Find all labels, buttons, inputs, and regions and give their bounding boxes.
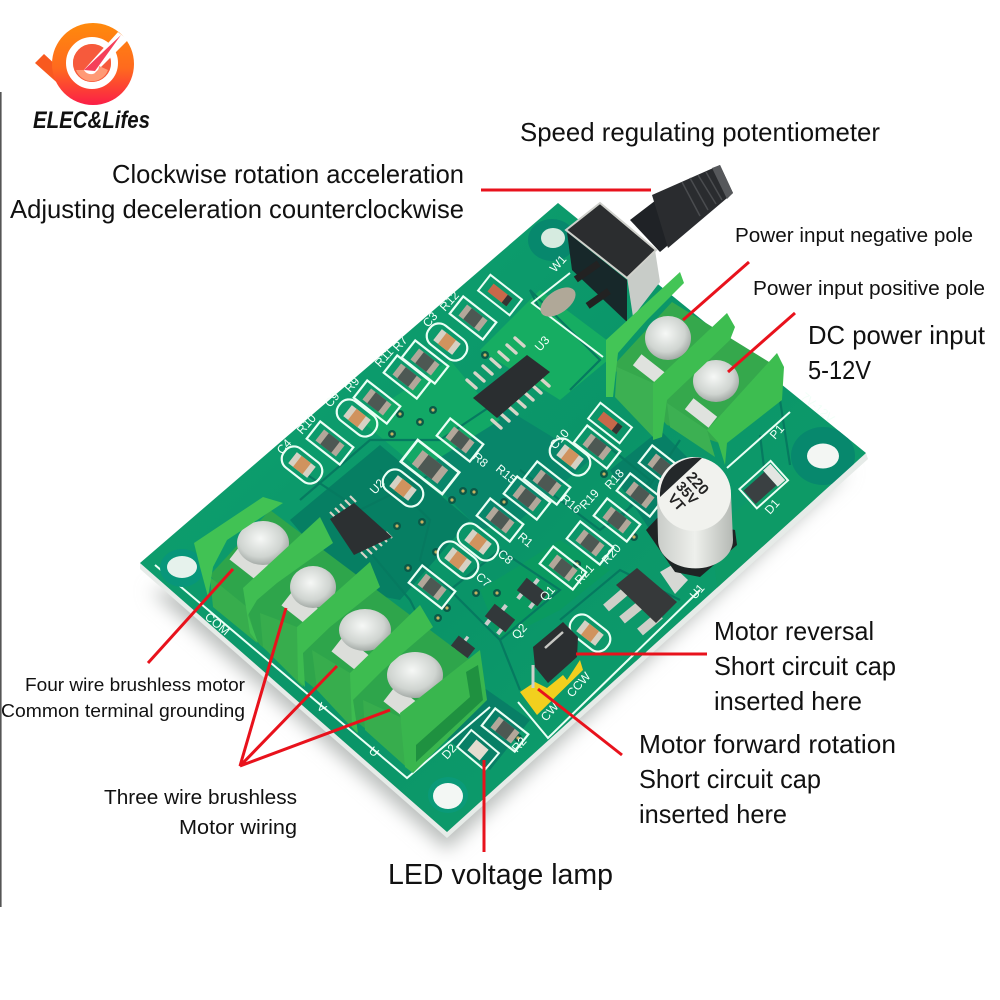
IC U3 bbox=[467, 338, 550, 428]
arrow: motor forward bbox=[538, 689, 622, 755]
silkscreen labels: R12 bbox=[437, 288, 462, 314]
label: motor reversal: Short circuit cap bbox=[714, 651, 896, 681]
silkscreen labels: R2 bbox=[509, 734, 530, 755]
jumper with short circuit cap bbox=[520, 622, 583, 715]
power input terminal block bbox=[606, 272, 784, 465]
potentiometer bbox=[535, 165, 733, 322]
silkscreen labels: C3 bbox=[420, 309, 441, 330]
silkscreen labels: R16 bbox=[558, 492, 584, 517]
arrow: positive pole bbox=[728, 313, 795, 372]
electrolytic capacitor: 35V bbox=[673, 478, 702, 508]
label: motor reversal: inserted here bbox=[714, 686, 862, 716]
terminal front faces bbox=[210, 577, 413, 773]
silkscreen labels: R10 bbox=[294, 411, 319, 437]
label: four wire motor: Common terminal grounding bbox=[1, 700, 245, 721]
silkscreen labels: COM bbox=[202, 610, 233, 638]
label: motor reversal bbox=[714, 616, 896, 716]
silkscreen labels: R21 bbox=[572, 561, 597, 587]
copper pours and traces bbox=[155, 273, 840, 778]
silkscreen labels: CCW bbox=[564, 669, 594, 700]
soft shadow bbox=[150, 470, 850, 850]
IC U2 bbox=[330, 496, 392, 558]
silkscreen labels: D2 bbox=[439, 741, 460, 762]
screw: positive pole bbox=[685, 360, 739, 428]
silkscreen labels: C8 bbox=[495, 547, 516, 567]
silkscreen labels: C4 bbox=[274, 436, 295, 457]
silkscreen labels: C10 bbox=[547, 426, 572, 452]
label: four wire motor: Four wire brushless motor bbox=[25, 674, 245, 695]
vias bbox=[388, 351, 638, 742]
housing bbox=[535, 203, 660, 322]
electrolytic capacitor: VT bbox=[665, 490, 689, 514]
label: motor forward rotation bbox=[639, 729, 896, 829]
silkscreen labels: U3 bbox=[532, 333, 553, 354]
icon: logo target mark bbox=[35, 23, 134, 105]
voltage regulator U1 bbox=[606, 565, 688, 632]
arrow: potentiometer direction bbox=[481, 188, 651, 192]
board edge thickness bbox=[140, 453, 868, 838]
silkscreen labels: R19 bbox=[577, 486, 602, 512]
left edge rule bbox=[0, 92, 2, 907]
label: LED voltage lamp: LED voltage lamp bbox=[388, 859, 613, 891]
silkscreen labels: Q2 bbox=[509, 621, 530, 642]
silkscreen labels: Q1 bbox=[537, 583, 558, 604]
electrolytic capacitor: 220 bbox=[683, 469, 712, 499]
label: three wire motor: Motor wiring bbox=[179, 816, 297, 839]
silkscreen labels: D1 bbox=[762, 496, 783, 517]
label: three wire motor bbox=[104, 786, 297, 839]
silkscreen labels: R7 bbox=[390, 333, 411, 354]
label: rotation direction bbox=[10, 159, 464, 224]
brand name: ELEC&Lifes bbox=[33, 107, 150, 134]
silkscreen labels: U bbox=[366, 744, 382, 760]
silkscreen labels: R20 bbox=[599, 541, 624, 567]
motor terminal block bbox=[194, 497, 487, 773]
label: three wire motor: Three wire brushless bbox=[104, 786, 297, 809]
label: DC power input: 5-12V bbox=[808, 355, 872, 385]
silkscreen labels: C7 bbox=[473, 570, 494, 590]
silkscreen labels: R15 bbox=[493, 462, 519, 487]
label: positive pole: Power input positive pole bbox=[753, 278, 985, 300]
silkscreen labels: R18 bbox=[602, 466, 627, 492]
label: motor forward rotation: Motor forward rotation bbox=[639, 729, 896, 759]
shaft and knob bbox=[630, 165, 733, 252]
terminal front faces bbox=[615, 367, 715, 457]
silkscreen labels: R9 bbox=[342, 374, 363, 395]
SMD resistors bbox=[307, 296, 685, 752]
silkscreen labels: R11 bbox=[372, 345, 397, 370]
label: rotation direction: Clockwise rotation acceleration bbox=[112, 159, 464, 189]
label: DC power input bbox=[808, 320, 986, 385]
silkscreen labels: CW bbox=[538, 699, 562, 724]
silkscreen labels: P1 bbox=[767, 421, 787, 442]
silkscreen labels: R8 bbox=[470, 450, 491, 470]
screw: negative pole bbox=[633, 316, 691, 384]
mounting holes bbox=[160, 219, 855, 813]
arrow: negative pole bbox=[683, 262, 749, 320]
label: rotation direction: Adjusting deceleration counterclockwise bbox=[10, 194, 464, 224]
LED D2 bbox=[457, 730, 499, 770]
board surface bbox=[140, 203, 866, 832]
arrows: three wire motor bbox=[240, 608, 390, 766]
silkscreen labels: 7V-12V bbox=[798, 390, 837, 426]
red leader lines bbox=[148, 190, 795, 852]
label: motor reversal: Motor reversal bbox=[714, 616, 874, 646]
screw terminals bbox=[229, 521, 443, 722]
logo bbox=[33, 23, 150, 134]
silkscreen labels: W1 bbox=[547, 252, 569, 275]
label: motor forward rotation: Short circuit cap bbox=[639, 764, 821, 794]
label: motor forward rotation: inserted here bbox=[639, 799, 787, 829]
label: potentiometer: Speed regulating potentiometer bbox=[520, 117, 880, 147]
diodes bbox=[478, 275, 788, 508]
silkscreen labels: U1 bbox=[687, 581, 708, 602]
terminal walls bbox=[606, 272, 784, 465]
terminal walls bbox=[194, 497, 487, 773]
arrow: common terminal bbox=[148, 569, 233, 663]
transistors bbox=[448, 573, 551, 662]
silkscreen labels bbox=[202, 252, 837, 762]
silkscreen labels: C9 bbox=[322, 389, 343, 410]
silkscreen labels: V bbox=[314, 700, 329, 715]
silkscreen labels: R1 bbox=[515, 530, 536, 550]
label: DC power input: DC power input bbox=[808, 320, 986, 350]
SMD capacitors bbox=[277, 319, 615, 656]
circuit board bbox=[140, 165, 868, 850]
silkscreen labels: U2 bbox=[367, 476, 388, 497]
electrolytic capacitor bbox=[646, 457, 737, 577]
arrow: motor reversal bbox=[576, 652, 707, 656]
label: four wire motor bbox=[1, 674, 245, 721]
label: negative pole: Power input negative pole bbox=[735, 225, 973, 247]
arrow: LED bbox=[482, 760, 486, 852]
